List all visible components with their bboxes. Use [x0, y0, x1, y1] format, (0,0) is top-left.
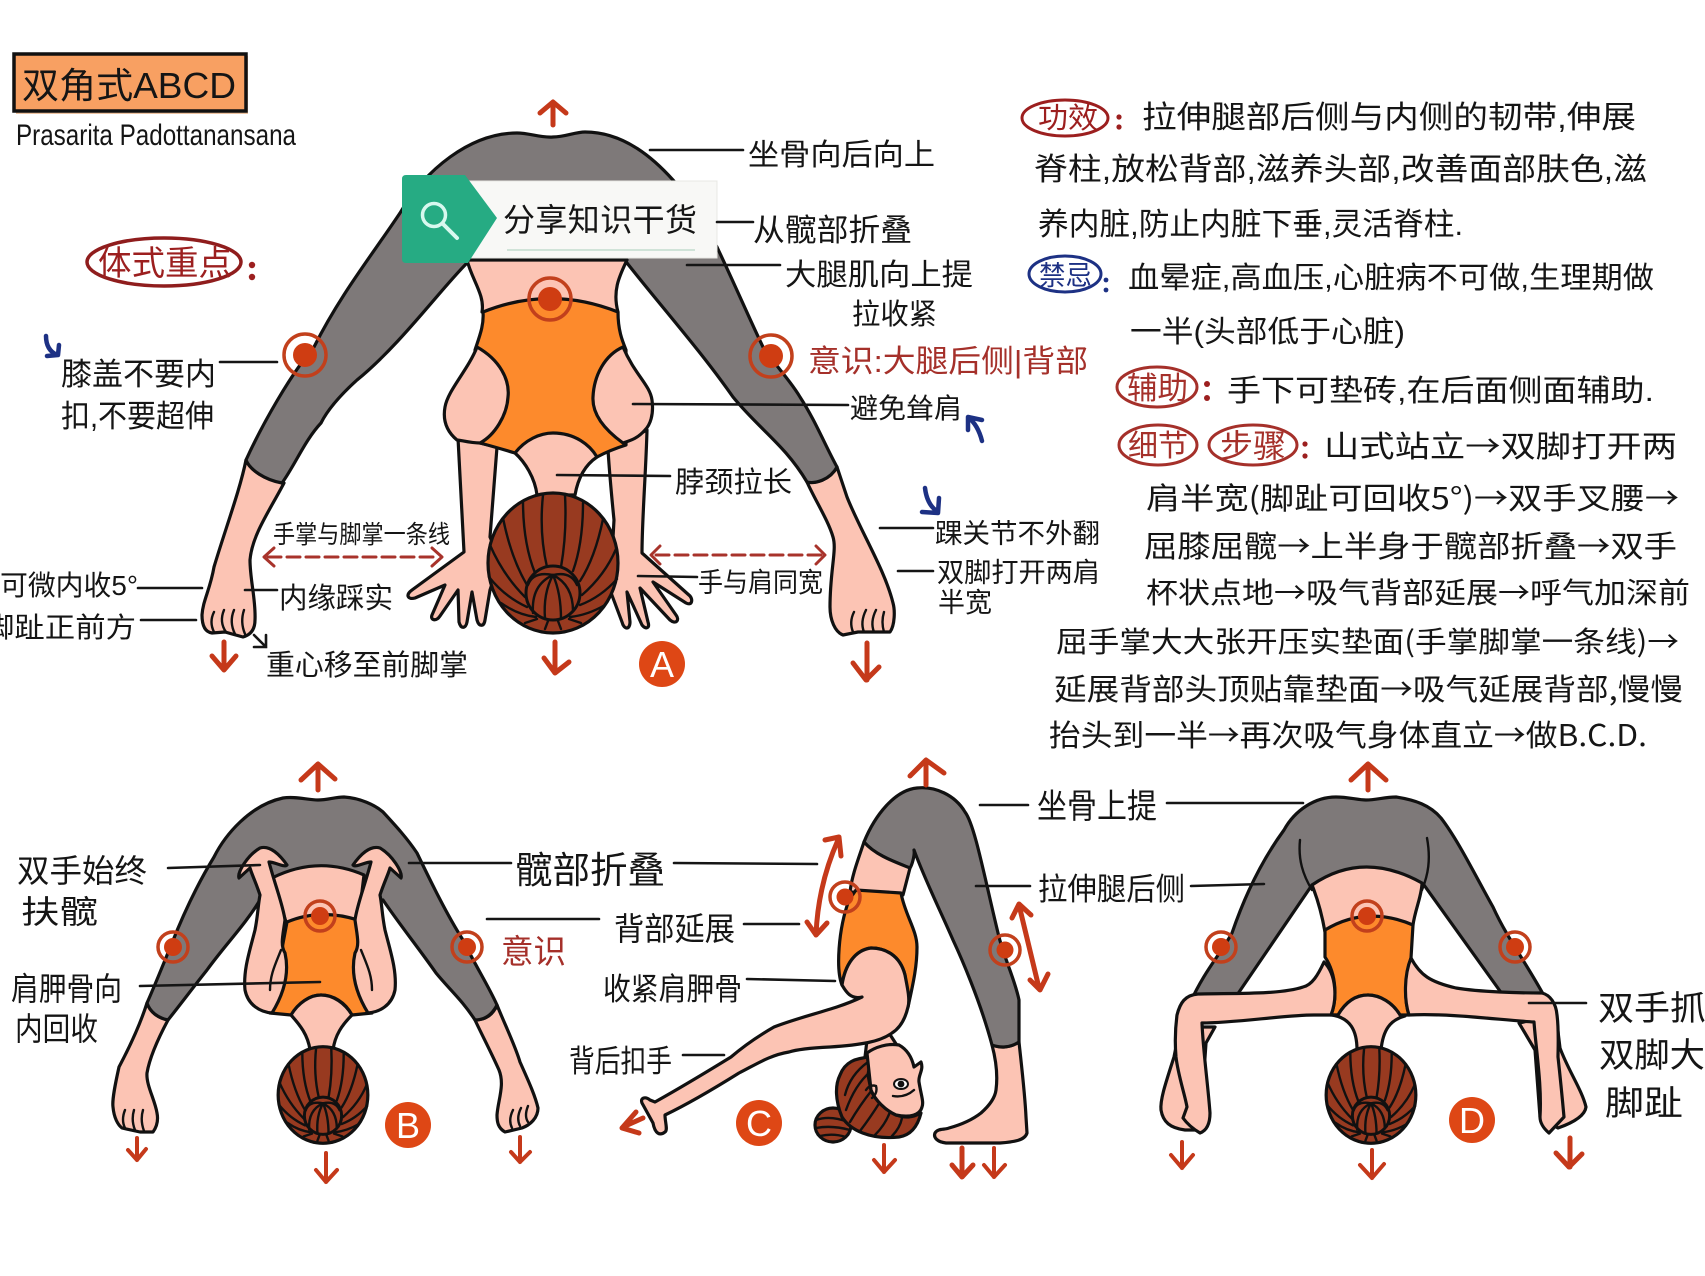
C arrow up [910, 760, 944, 785]
label: knee: 扣,不要超伸 [61, 399, 214, 434]
C arm [642, 948, 909, 1134]
B arrow left [128, 1138, 146, 1160]
D label: grab toes: 双脚大 [1599, 1037, 1705, 1075]
steps text: 屈膝屈髋→上半身于髋部折叠→双手 [1144, 522, 1677, 566]
C target knee [990, 935, 1020, 965]
label: knee [61, 357, 277, 434]
steps text: 抬头到一半→再次吸气身体直立→做B.C.D. [1049, 711, 1647, 755]
D arrow up [1351, 764, 1386, 790]
contraindications tag: 禁忌 [1039, 261, 1092, 291]
label: thigh muscles: 大腿肌向上提 [785, 259, 973, 292]
C leggings [864, 788, 1019, 1047]
A labels [0, 139, 1100, 682]
steps text: 山式站立→双脚打开两 [1324, 422, 1677, 466]
A arrow head [544, 642, 569, 673]
search banner: 分享知识干货 [503, 202, 697, 238]
label: shift weight [254, 635, 468, 682]
arrow: palm and foot line [268, 556, 438, 558]
details and steps tags: 细节 [1128, 430, 1188, 463]
assistance text: 手下可垫砖,在后面侧面辅助. [1227, 375, 1654, 408]
B neck [291, 995, 352, 1050]
B label: shoulder blades [11, 971, 320, 1047]
C face [866, 1044, 923, 1116]
B arrow right [511, 1137, 530, 1162]
label: stretch back of legs: 拉伸腿后侧 [1038, 872, 1185, 907]
label: ankle: 踝关节不外翻 [935, 519, 1100, 549]
C arrow hand [622, 1112, 643, 1133]
B target right knee [452, 932, 482, 962]
A neck [515, 433, 597, 495]
D arrow head [1360, 1150, 1384, 1178]
details and steps tags [1119, 425, 1308, 465]
D orange top [1325, 916, 1413, 1015]
label: tighten shoulder blades: 收紧肩胛骨 [603, 972, 742, 1007]
label: palm and foot line: 手掌与脚掌一条线 [273, 521, 450, 549]
C curved arrow back [807, 837, 841, 935]
A badge [639, 641, 685, 687]
D arrow left [1171, 1142, 1193, 1168]
B left lower leg [113, 1003, 168, 1132]
B leggings [147, 797, 497, 1020]
C arrow head [874, 1145, 895, 1172]
C arrow foot 1 [952, 1148, 973, 1177]
B waist [272, 866, 364, 925]
effects tag [1022, 100, 1122, 136]
heading: key points [87, 238, 255, 286]
icon: blue arrow shoulder [968, 417, 982, 441]
subtitle: Prasarita Padottanansana [16, 119, 296, 152]
A left lower leg and foot [202, 460, 284, 637]
C badge [736, 1100, 782, 1146]
B left arm [239, 847, 287, 1013]
B label: hands on hips: 扶髋 [21, 894, 98, 930]
label: inward 5 degrees: 可微内收5° [0, 570, 138, 601]
details and steps tags: 步骤 [1220, 428, 1286, 464]
label: back extension [487, 911, 799, 947]
A left shoulder [444, 347, 508, 443]
A leggings [246, 132, 837, 483]
B target left knee [158, 932, 188, 962]
D target waist [1352, 901, 1382, 931]
figure C: side view [622, 760, 1048, 1177]
label: foot width: 双脚打开两肩 [937, 558, 1100, 588]
label: avoid shrugging: 避免耸肩 [850, 393, 962, 424]
D label: grab toes: 脚趾 [1605, 1085, 1683, 1123]
label: knee: 膝盖不要内 [61, 357, 216, 392]
D waist [1312, 867, 1422, 932]
A right shoulder [593, 347, 653, 443]
contraindications text: 血晕症,高血压,心脏病不可做,生理期做 [1128, 262, 1654, 295]
C target back [830, 882, 860, 912]
A right arm and hand [608, 430, 692, 628]
label: hands shoulder width: 手与肩同宽 [698, 568, 823, 598]
C hair [836, 1057, 921, 1138]
C waist [850, 842, 910, 895]
B arrow head [316, 1153, 337, 1182]
D target left knee [1206, 932, 1236, 962]
D left foot [1161, 1027, 1215, 1130]
effects text [1034, 100, 1647, 242]
A badge: A [650, 644, 674, 685]
label: thigh muscles: 拉收紧 [852, 298, 937, 331]
A left arm and hand [408, 438, 500, 627]
contraindications text: 一半(头部低于心脏) [1130, 316, 1405, 349]
D target right knee [1500, 932, 1530, 962]
A waist skin [467, 260, 627, 312]
label: fold from hips: 从髋部折叠 [753, 213, 912, 248]
effects text: 拉伸腿部后侧与内侧的韧带,伸展 [1142, 100, 1636, 135]
C badge: C [746, 1103, 772, 1144]
B target waist [305, 901, 335, 931]
B badge: B [396, 1105, 420, 1146]
A arrow up [540, 102, 566, 125]
figure D: holding toes [1161, 764, 1705, 1178]
effects text: 养内脏,防止内脏下垂,灵活脊柱. [1038, 207, 1463, 242]
effects text: 脊柱,放松背部,滋养头部,改善面部肤色,滋 [1034, 152, 1647, 187]
figure B: hands on hips [11, 764, 566, 1182]
label: sitting bones: 坐骨向后向上 [748, 139, 935, 172]
A target waist [529, 278, 571, 320]
C bun [815, 1108, 851, 1142]
A arrow left foot [212, 642, 236, 670]
B orange top [270, 914, 372, 1015]
assistance tag: 辅助 [1127, 371, 1188, 406]
D label: grab toes [1529, 990, 1705, 1123]
A hair [488, 493, 618, 633]
D right foot [1519, 1015, 1586, 1128]
D arrow right [1556, 1138, 1582, 1167]
C arrow leg [1012, 904, 1048, 990]
A arrow right foot [853, 643, 879, 680]
B arrow up [301, 764, 335, 790]
A target right knee [750, 335, 792, 377]
C neck [865, 1033, 900, 1057]
effects tag: 功效 [1038, 102, 1098, 135]
D badge: D [1459, 1100, 1485, 1141]
B label: hands on hips [17, 853, 260, 930]
C labels [409, 788, 1303, 1079]
label: awareness: 意识:大腿后侧|背部 [808, 344, 1088, 379]
title badge: 双角式ABCD [22, 65, 236, 106]
B label: shoulder blades: 肩胛骨向 [11, 971, 122, 1007]
arrow: hand to foot width [656, 554, 822, 556]
right text panel [1022, 100, 1690, 755]
B label: awareness: 意识 [501, 933, 566, 970]
C orange top [839, 890, 917, 1007]
D hair [1326, 1047, 1416, 1143]
arrow heads right [651, 546, 825, 564]
D right arm [1405, 958, 1564, 1133]
label: back extension: 背部延展 [614, 911, 735, 947]
A orange top [475, 298, 626, 457]
heading: key points: 体式重点 [98, 245, 232, 283]
label: shift weight: 重心移至前脚掌 [266, 649, 468, 682]
D left arm [1175, 962, 1335, 1133]
D badge [1449, 1097, 1495, 1143]
steps text: 延展背部头顶贴靠垫面→吸气延展背部,慢慢 [1054, 665, 1683, 709]
label: lift sitting bones: 坐骨上提 [1037, 788, 1157, 826]
steps text: 屈手掌大大张开压实垫面(手掌脚掌一条线)→ [1056, 619, 1679, 661]
icon: blue arrow ankle [922, 488, 939, 513]
arrow heads left [264, 548, 442, 566]
D neck [1332, 995, 1405, 1050]
A target left knee [284, 334, 326, 376]
contraindications tag [1029, 256, 1108, 292]
B label: hands on hips: 双手始终 [17, 853, 147, 889]
B right lower leg [475, 1005, 538, 1132]
title badge [14, 54, 248, 114]
steps text: 肩半宽(脚趾可回收5°)→双手叉腰→ [1146, 474, 1679, 518]
contraindications text [1128, 262, 1654, 349]
C standing lower leg [935, 1042, 1027, 1143]
B hair [278, 1047, 368, 1143]
label: clasp hands: 背后扣手 [569, 1044, 672, 1079]
label: foot width [898, 558, 1100, 618]
D leggings [1190, 797, 1548, 1003]
C arrow foot 2 [984, 1148, 1005, 1177]
label: lengthen neck: 脖颈拉长 [675, 466, 792, 499]
B right arm [353, 847, 401, 1013]
label: thigh muscles [687, 259, 973, 331]
steps text: 杯状点地→吸气背部延展→呼气加深前 [1146, 570, 1690, 612]
label: hip fold: 髋部折叠 [515, 850, 665, 891]
search banner [402, 175, 717, 263]
assistance tag [1117, 367, 1210, 407]
B badge [385, 1102, 431, 1148]
A right lower leg and foot [807, 467, 894, 635]
figure A: front fold [202, 102, 894, 687]
B label: shoulder blades: 内回收 [15, 1011, 98, 1047]
steps text [1049, 422, 1690, 755]
label: foot width: 半宽 [938, 588, 992, 618]
icon: blue arrow knee [46, 336, 59, 356]
label: inner edge: 内缘踩实 [279, 582, 393, 615]
D label: grab toes: 双手抓 [1598, 990, 1705, 1028]
